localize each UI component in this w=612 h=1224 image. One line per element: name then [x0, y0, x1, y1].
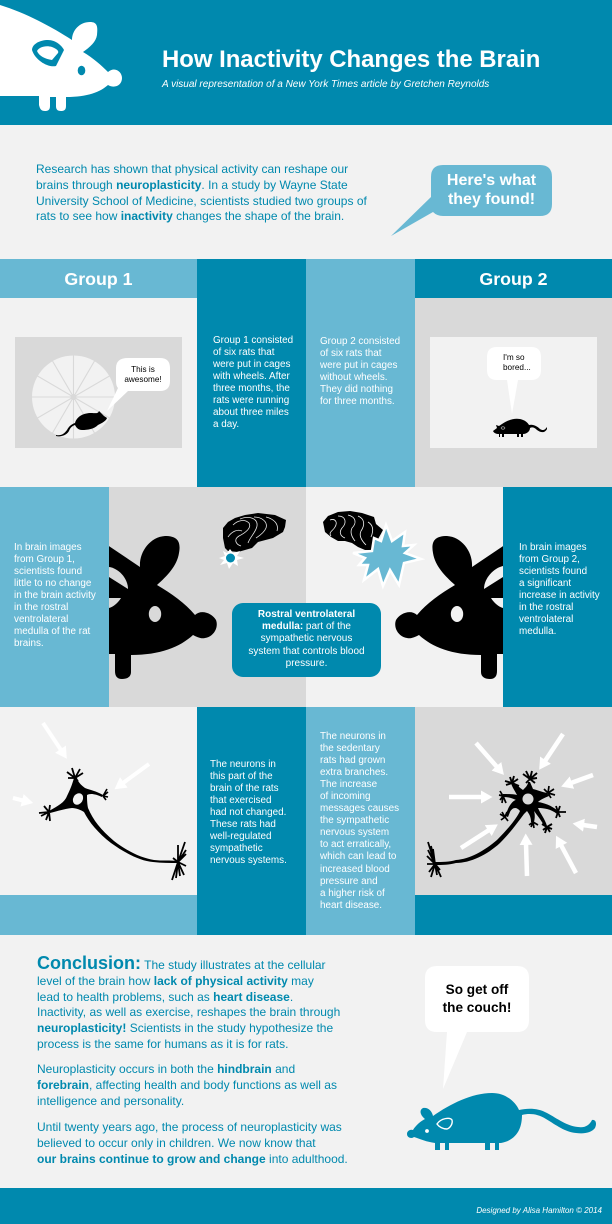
icon: small burst — [219, 549, 244, 569]
callout text: here's what they found: Here's what — [447, 172, 536, 189]
text: group 1 brain finding: from Group 1, — [14, 554, 75, 565]
text: group 1 brain finding: medulla of the rat — [14, 626, 90, 637]
bubble text: i'm so bored: bored... — [503, 362, 531, 372]
text: group 1 neurons: sympathetic — [210, 843, 263, 854]
panel: row 3 right footer strip — [415, 895, 612, 935]
bubble text: so get off the couch: So get off — [446, 982, 508, 997]
text: group 1 description — [213, 335, 293, 430]
icon: teal mouse — [407, 1093, 596, 1150]
footer band — [0, 1188, 612, 1224]
callout text: rostral ventrolateral medulla: medulla: part of the — [262, 621, 351, 632]
text: group 2 brain finding: scientists found — [519, 566, 587, 577]
intro text — [36, 162, 367, 223]
speech bubble: this is awesome — [107, 358, 170, 411]
panel: group 1 description — [197, 259, 306, 487]
icon: simple neuron — [39, 768, 186, 880]
text: conclusion: Inactivity, as well as exercise, reshapes the brain through — [37, 1005, 340, 1019]
callout text: rostral ventrolateral medulla — [248, 609, 365, 669]
text: group 2 neurons: which can lead to — [320, 851, 396, 862]
panel: row 2 right text background — [503, 487, 612, 707]
text: group 1 neurons: brain of the rats — [210, 783, 279, 794]
panel: row 3 text 2 — [306, 707, 415, 935]
text: group 2 neurons: The increase — [320, 779, 377, 790]
icon: black mouse left — [100, 536, 217, 679]
panel: row 3 left neuron background — [0, 895, 197, 935]
text: group 2 description — [320, 336, 400, 407]
text: group 2 description: Group 2 consisted — [320, 336, 400, 347]
text: group 2 brain finding: ventrolateral — [519, 614, 573, 625]
text: group 2 description: were put in cages — [320, 360, 397, 371]
panel: group 2 idle scene — [430, 337, 597, 448]
text: neuroplasticity regions: forebrain, affecting health and body functions as well as — [37, 1078, 337, 1092]
heading: group 2: Group 2 — [479, 269, 548, 289]
text: group 2 neurons: extra branches. — [320, 767, 388, 778]
text: group 2 neurons: the sedentary — [320, 743, 380, 754]
text: group 2 brain finding: In brain images — [519, 542, 587, 553]
speech bubble: bored — [487, 347, 541, 414]
text: group 2 description: of six rats that — [320, 348, 381, 359]
icon: white header mouse — [0, 5, 122, 111]
panel: group 2 description — [306, 259, 415, 487]
text: conclusion: level of the brain how lack of physical activity may — [37, 974, 314, 988]
text: group 1 brain finding — [14, 542, 96, 649]
icon: idle mouse — [493, 419, 547, 437]
text: group 2 brain finding: from Group 2, — [519, 554, 580, 565]
text: group 2 neurons: heart disease. — [320, 900, 382, 911]
intro text: Research has shown that physical activity can reshape our — [36, 162, 348, 176]
header band — [0, 0, 612, 125]
text: group 2 neurons: messages causes — [320, 803, 399, 814]
footer credit: Designed by Alisa Hamilton © 2014 — [476, 1206, 602, 1215]
speech bubble: here's what they found — [391, 165, 552, 236]
callout text: rostral ventrolateral medulla: Rostral ventrolateral — [258, 609, 355, 620]
speech bubble: so get off the couch — [425, 966, 529, 1089]
panel: row 3 right neuron background — [415, 707, 612, 895]
panel: group 2 header — [415, 259, 612, 298]
intro text: brains through neuroplasticity. In a study by Wayne State — [36, 178, 348, 192]
text: group 2 description: They did nothing — [320, 384, 393, 395]
text: group 1 brain finding: in the rostral — [14, 602, 68, 613]
text: group 2 brain finding — [519, 542, 600, 637]
text: group 2 neurons: pressure and — [320, 876, 378, 887]
callout text: here's what they found — [447, 172, 536, 208]
text: group 2 neurons — [320, 731, 399, 911]
text: group 1 neurons: well-regulated — [210, 831, 271, 842]
text: group 2 neurons: rats had grown — [320, 755, 385, 766]
text: group 1 brain finding: In brain images — [14, 542, 82, 553]
bubble text: this is awesome: This is — [131, 365, 155, 374]
bubble text: this is awesome — [124, 365, 162, 384]
text: group 1 description: rats were running — [213, 395, 289, 406]
text: group 1 neurons — [210, 759, 287, 866]
panel: row 2 left image background — [109, 487, 306, 707]
text: neuroplasticity regions — [37, 1062, 337, 1108]
callout text: here's what they found: they found! — [448, 191, 535, 208]
text: group 1 description: about three miles — [213, 407, 289, 418]
text: group 1 brain finding: brains. — [14, 638, 44, 649]
text: group 2 neurons: a higher risk of — [320, 888, 385, 899]
text: adulthood: our brains continue to grow and change into adulthood. — [37, 1152, 348, 1166]
text: group 1 neurons: had not changed. — [210, 807, 286, 818]
panel: group 1 header — [0, 259, 197, 298]
text: group 1 description: three months, the — [213, 383, 290, 394]
subtitle: A visual representation of a New York Times article by Gretchen Reynolds — [162, 79, 489, 90]
icon: brain right — [323, 511, 383, 550]
panel: row 3 text 1 — [197, 707, 306, 935]
text: conclusion: neuroplasticity! Scientists in the study hypothesize the — [37, 1021, 333, 1035]
text: conclusion: lead to health problems, such as heart disease. — [37, 990, 293, 1004]
bubble text: i'm so bored — [503, 353, 531, 372]
arrows: simple neuron inputs — [13, 723, 149, 800]
bubble text: so get off the couch — [442, 982, 511, 1014]
text: group 2 brain finding: in the rostral — [519, 602, 573, 613]
bubble text: i'm so bored: I'm so — [503, 353, 525, 362]
bubble text: so get off the couch: the couch! — [443, 1000, 511, 1014]
text: group 2 description: without wheels. — [320, 372, 388, 383]
arrows: branched neuron inputs — [449, 734, 597, 876]
panel: row 2 left text background — [0, 487, 109, 707]
bubble text: this is awesome: awesome! — [124, 374, 162, 384]
text: group 2 neurons: nervous system — [320, 827, 389, 838]
text: group 1 description: Group 1 consisted — [213, 335, 293, 346]
text: group 2 neurons: the sympathetic — [320, 815, 389, 826]
text: group 2 brain finding: increase in activity — [519, 590, 600, 601]
icon: brain left — [223, 513, 286, 552]
text: adulthood: Until twenty years ago, the process of neuroplasticity was — [37, 1120, 342, 1134]
callout text: rostral ventrolateral medulla: sympathetic nervous — [261, 633, 352, 644]
text: group 1 brain finding: ventrolateral — [14, 614, 68, 625]
text: group 2 description: for three months. — [320, 396, 395, 407]
text: conclusion: process is the same for humans as it is for rats. — [37, 1037, 288, 1051]
text: group 2 brain finding: a significant — [519, 578, 571, 589]
text: group 1 neurons: The neurons in — [210, 759, 276, 770]
text: conclusion — [37, 953, 340, 1051]
text: neuroplasticity regions: intelligence and personality. — [37, 1094, 184, 1108]
icon: black mouse right — [395, 536, 512, 679]
callout box — [232, 603, 381, 677]
text: group 1 neurons: These rats had — [210, 819, 276, 830]
text: group 1 brain finding: little to no change — [14, 578, 91, 589]
text: group 1 neurons: nervous systems. — [210, 855, 287, 866]
text: group 1 description: a day. — [213, 419, 239, 430]
text: group 1 neurons: that exercised — [210, 795, 271, 806]
text: group 2 brain finding: medulla. — [519, 626, 556, 637]
text: group 1 description: with wheels. After — [213, 371, 290, 382]
text: group 1 description: of six rats that — [213, 347, 274, 358]
callout text: rostral ventrolateral medulla: pressure. — [286, 658, 327, 669]
heading: group 1: Group 1 — [64, 269, 133, 289]
text: adulthood: believed to occur only in children. We now know that — [37, 1136, 316, 1150]
icon: large burst — [353, 525, 421, 586]
icon: running mouse — [56, 411, 107, 436]
text: group 1 brain finding: in the brain activity — [14, 590, 96, 601]
icon: branched neuron — [427, 771, 566, 877]
intro text: rats to see how inactivity changes the shape of the brain. — [36, 209, 344, 223]
panel: group 2 scene background — [415, 298, 612, 487]
title: How Inactivity Changes the Brain — [162, 46, 540, 73]
panel: group 1 wheel scene — [15, 337, 182, 448]
text: group 2 neurons: to act erratically, — [320, 839, 391, 850]
intro text: University School of Medicine, scientists studied two groups of — [36, 194, 367, 208]
text: group 1 brain finding: scientists found — [14, 566, 82, 577]
text: group 1 neurons: this part of the — [210, 771, 273, 782]
text: group 1 description: were put in cages — [213, 359, 290, 370]
callout text: rostral ventrolateral medulla: system that controls blood — [248, 646, 365, 657]
text: group 2 neurons: increased blood — [320, 864, 390, 875]
text: conclusion: Conclusion: The study illustrates at the cellular — [37, 953, 326, 973]
text: group 2 neurons: The neurons in — [320, 731, 386, 742]
text: neuroplasticity regions: Neuroplasticity occurs in both the hindbrain and — [37, 1062, 295, 1076]
text: adulthood — [37, 1120, 348, 1166]
text: group 2 neurons: of incoming — [320, 791, 370, 802]
